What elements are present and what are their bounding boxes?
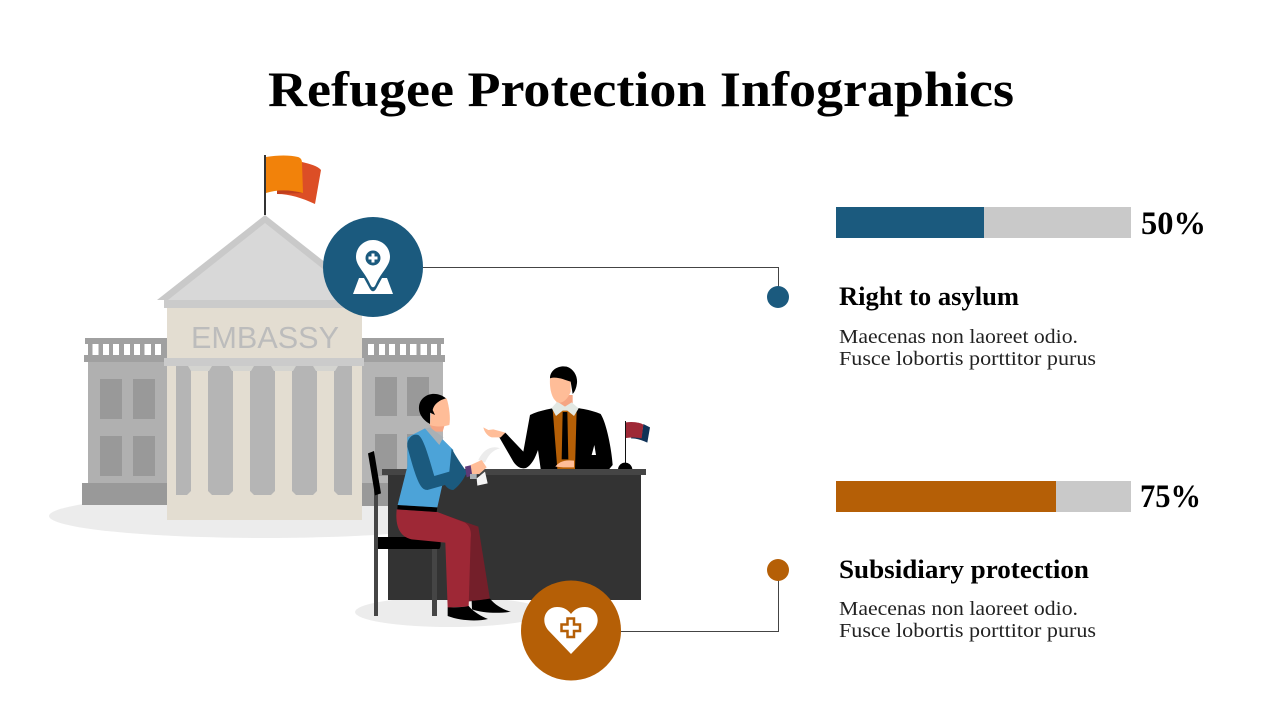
embassy sign text: EMBASSY [191, 320, 339, 355]
body text: Fusce lobortis porttitor purus [839, 348, 1096, 370]
cuff [465, 465, 473, 477]
body text: Fusce lobortis porttitor purus [839, 620, 1096, 642]
desk ground shadow [355, 597, 545, 627]
connector: right to asylum [423, 268, 778, 290]
building ground shadow [49, 494, 481, 538]
heading: Subsidiary protection [839, 555, 1090, 584]
panel: right to asylum [767, 206, 1206, 370]
illustration: asylum interview at desk [355, 366, 650, 627]
far leg [437, 512, 490, 602]
connector: subsidiary protection [621, 580, 778, 632]
icon: map pin badge [323, 217, 423, 317]
paper [478, 447, 500, 463]
belt [397, 505, 437, 512]
hand [471, 460, 487, 474]
officer figure [483, 366, 613, 469]
left wing [82, 338, 168, 505]
panel: subsidiary protection [767, 479, 1201, 642]
central portico [157, 215, 373, 520]
illustration: embassy building [49, 155, 481, 538]
value 50%: 50% [1141, 206, 1206, 242]
body text [839, 326, 1096, 370]
flag on roof [264, 155, 321, 215]
neck and collar [429, 424, 445, 432]
icon: heart badge [521, 580, 621, 680]
body text: Maecenas non laoreet odio. [839, 598, 1078, 620]
sleeve [407, 435, 467, 490]
officer, hands and desk flag [368, 366, 650, 620]
body text: Maecenas non laoreet odio. [839, 326, 1078, 348]
timeline dot [767, 286, 789, 308]
head [430, 398, 450, 427]
heading: Right to asylum [839, 282, 1019, 311]
value 75%: 75% [1140, 479, 1201, 515]
vest [398, 428, 453, 507]
progress bar 50% [836, 207, 1131, 238]
desk [382, 469, 646, 600]
desk flag [618, 421, 650, 469]
hair [419, 394, 446, 424]
progress bar 75% [836, 481, 1131, 512]
right wing [362, 338, 445, 506]
body text [839, 598, 1096, 642]
title: Refugee Protection Infographics [268, 61, 1014, 117]
chair [368, 451, 441, 616]
seated applicant [396, 394, 511, 620]
timeline dot [767, 559, 789, 581]
near leg [396, 509, 471, 608]
